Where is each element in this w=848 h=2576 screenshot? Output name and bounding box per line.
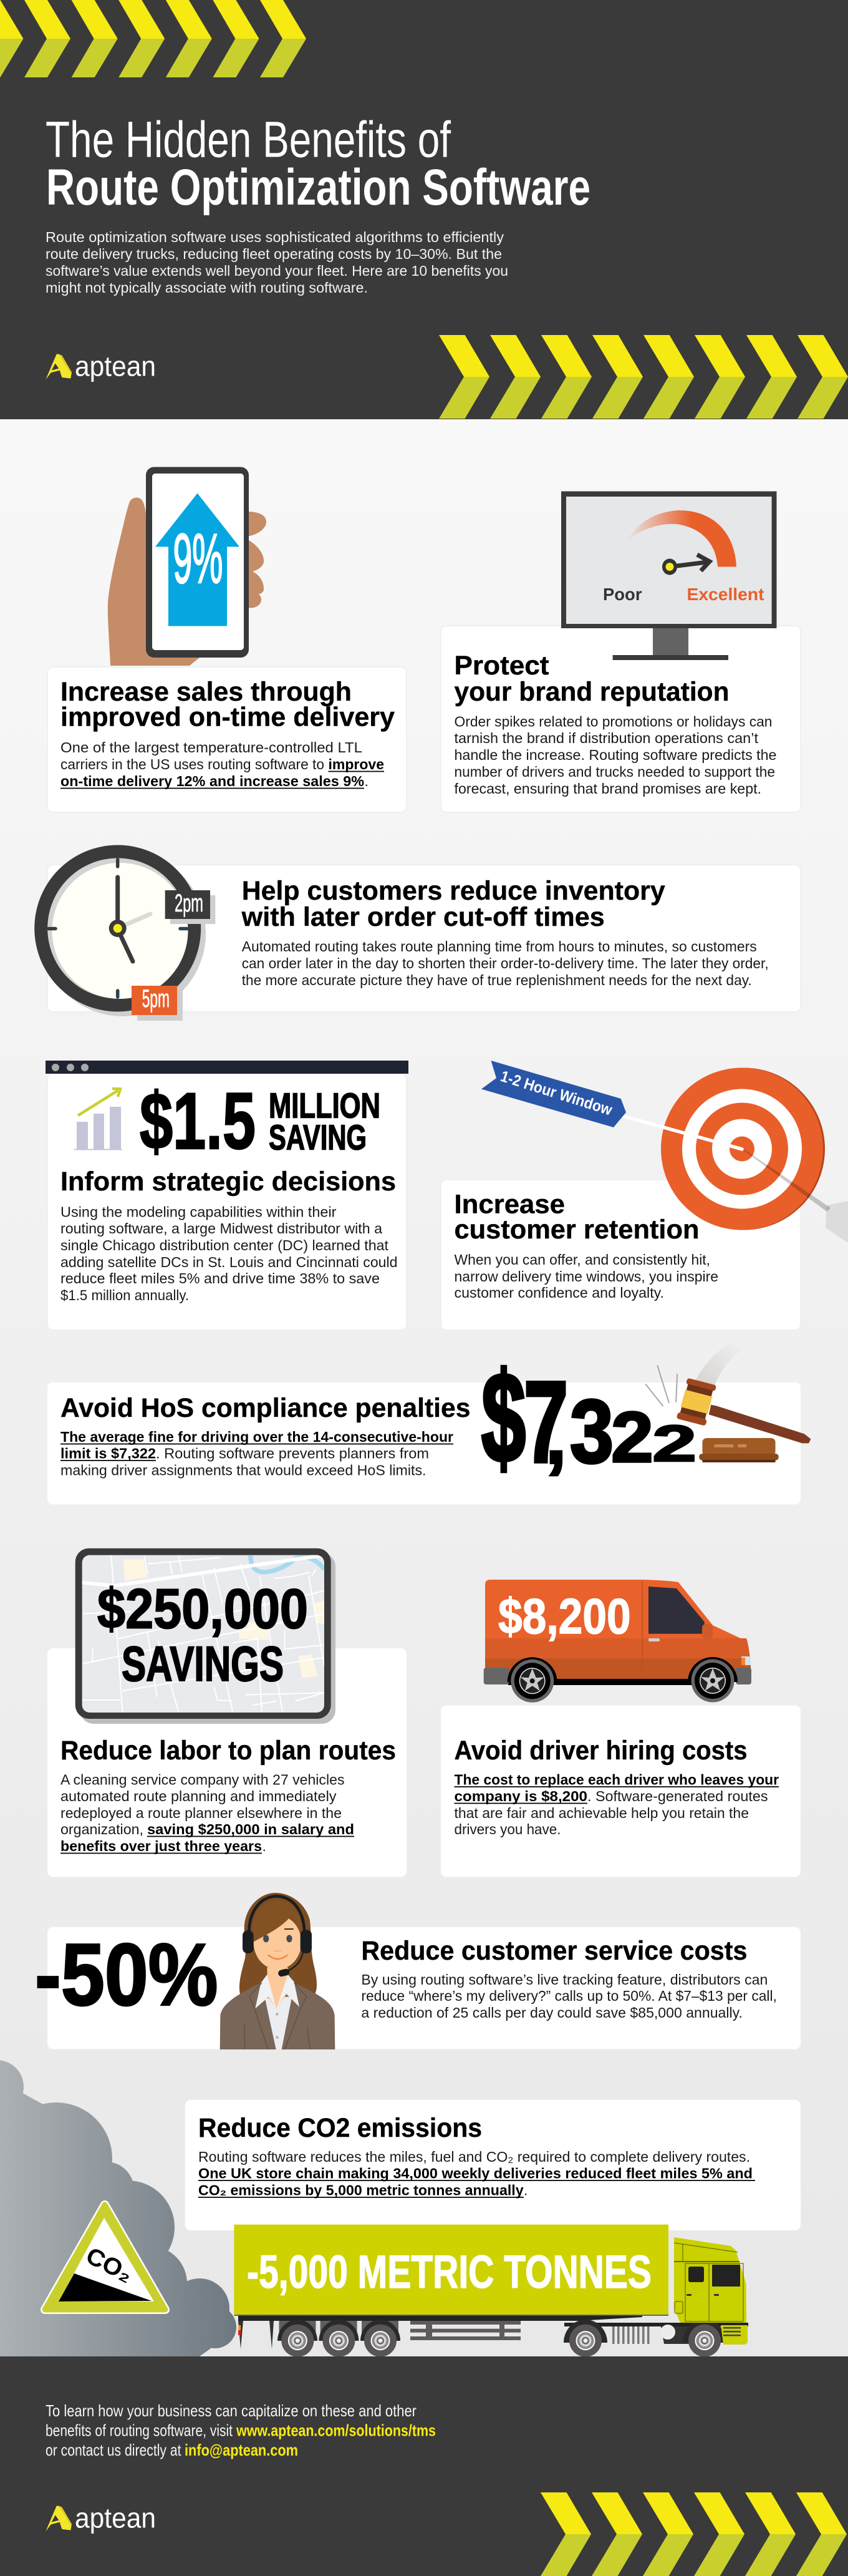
panel: customer retention <box>441 1180 801 1330</box>
text: reduce labor <box>60 1772 354 1854</box>
browser bar <box>46 1061 408 1074</box>
text: driver hiring costs: The cost to replace each driver who leaves your <box>454 1772 779 1788</box>
stat: $250,000 savings <box>97 1578 308 1691</box>
clock hands <box>109 877 150 961</box>
text: excellent: Excellent <box>687 585 764 604</box>
text: reduce labor: saving $250,000 in salary and <box>147 1821 354 1837</box>
icon: gavel <box>645 1343 811 1462</box>
text: driver hiring costs: company is $8,200 <box>454 1788 587 1804</box>
stat: $8,200: $8,200 <box>498 1588 631 1644</box>
heading: protect brand: Protect <box>454 651 549 681</box>
text: inform strategic decisions: reduce fleet miles 5% and drive time 38% to save <box>60 1270 380 1286</box>
icon: CO2 warning sign <box>45 2205 165 2310</box>
text: protect brand: number of drivers and trucks needed to support the <box>454 764 775 780</box>
chart: gauge arc <box>627 510 736 566</box>
stat: $7,322 in perspective: 2 <box>611 1398 653 1477</box>
call to action: info@aptean.com <box>185 2441 298 2459</box>
text: reduce inventory: the more accurate picture they have of true replenishment needs for the next day. <box>242 972 752 988</box>
text: reduce inventory: Automated routing takes route planning time from hours to minutes, so customers <box>242 938 757 955</box>
call to action <box>46 2401 436 2459</box>
intro paragraph: might not typically associate with routing software. <box>46 279 368 296</box>
text: HoS compliance: . Routing software prevents planners from <box>156 1445 429 1461</box>
label: 2pm <box>165 890 215 924</box>
stat: $250,000 savings: SAVINGS <box>122 1636 284 1691</box>
cab <box>674 2237 746 2323</box>
heading: customer retention <box>454 1190 700 1245</box>
heading: protect brand: your brand reputation <box>454 677 730 707</box>
heading: protect brand <box>454 651 730 707</box>
logo: aptean: aptean <box>75 351 156 382</box>
icon: gauge needle <box>662 555 710 575</box>
text: inform strategic decisions: Using the modeling capabilities within their <box>60 1204 337 1220</box>
panel: protect brand <box>441 626 801 812</box>
logo: aptean footer: aptean <box>75 2502 156 2534</box>
text: driver hiring costs: drivers you have. <box>454 1821 561 1837</box>
icon: up arrow 9%: 9% <box>173 520 223 598</box>
text: increase sales: carriers in the US uses routing software to <box>60 756 324 772</box>
text: customer service costs <box>361 1971 777 2021</box>
text: reduce labor: automated route planning and immediately <box>60 1788 337 1804</box>
stat: $250,000 savings: $250,000 <box>97 1578 308 1641</box>
icon: clock <box>34 845 215 1021</box>
heading: driver hiring costs: Avoid driver hiring costs <box>454 1736 747 1766</box>
panel: driver hiring costs <box>441 1706 801 1877</box>
heading: reduce inventory: with later order cut-off times <box>241 902 605 932</box>
illustration: exhaust cloud <box>0 2060 236 2356</box>
chevrons: top left <box>0 0 306 77</box>
heading: reduce CO2: Reduce CO2 emissions <box>198 2113 482 2143</box>
chevrons: header bottom right <box>439 335 848 419</box>
text: customer retention: customer confidence and loyalty. <box>454 1285 664 1301</box>
van window <box>648 1587 705 1634</box>
text: increase sales: One of the largest temperature-controlled LTL <box>60 739 362 756</box>
heading: reduce labor: Reduce labor to plan routes <box>60 1736 396 1766</box>
chevrons: footer <box>541 2492 847 2576</box>
header band <box>0 0 848 419</box>
stat: -50%: -50% <box>35 1925 218 2024</box>
stat: $7,322 in perspective: 2 <box>652 1414 696 1472</box>
panel: customer service costs <box>47 1927 801 2049</box>
title: Route Optimization Software <box>46 159 590 216</box>
icon: tablet with map <box>75 1548 335 1724</box>
text: HoS compliance: limit is $7,322 <box>60 1445 156 1461</box>
text: reduce CO2: . <box>524 2182 528 2199</box>
tractor chassis <box>564 2320 748 2344</box>
text: inform strategic decisions: routing software, a large Midwest distributor with a <box>60 1220 382 1237</box>
stat: $1.5 million saving: $1.5 <box>140 1077 256 1166</box>
stat: $7,322 in perspective <box>481 1346 696 1489</box>
intro paragraph: software’s value extends well beyond your fleet. Here are 10 benefits you <box>46 263 508 279</box>
icon: target with arrow <box>481 1061 848 1243</box>
text: reduce inventory: can order later in the day to shorten their order-to-delivery time. The later they order, <box>242 955 769 971</box>
text: reduce labor: organization, <box>60 1821 143 1837</box>
icon: customer service agent <box>220 1893 335 2049</box>
intro paragraph <box>46 229 508 296</box>
heading: inform strategic decisions: Inform strategic decisions <box>60 1167 396 1197</box>
text: HoS compliance: The average fine for driving over the 14-consecutive-hour <box>60 1429 453 1445</box>
heading: reduce inventory <box>241 876 665 932</box>
stat: $7,322 in perspective: 3 <box>570 1381 614 1482</box>
icon: monitor with gauge <box>561 492 777 660</box>
side rails <box>410 2321 521 2340</box>
panel: reduce inventory <box>47 865 801 1012</box>
text: reduce inventory <box>242 938 769 988</box>
heading: increase sales: improved on-time delivery <box>60 702 395 732</box>
text: driver hiring costs: that are fair and achievable help you retain the <box>454 1805 749 1821</box>
icon: up arrow 9% <box>155 493 239 626</box>
text: protect brand: forecast, ensuring that brand promises are kept. <box>454 780 761 797</box>
call to action: www.aptean.com/solutions/tms <box>236 2421 436 2440</box>
call to action: or contact us directly at <box>46 2441 181 2459</box>
stat: $1.5 million saving <box>140 1077 380 1166</box>
text: customer retention: narrow delivery time windows, you inspire <box>454 1268 718 1285</box>
truck text: -5,000 METRIC TONNES <box>247 2246 652 2298</box>
text: poor: Poor <box>603 585 642 604</box>
intro paragraph: Route optimization software uses sophisticated algorithms to efficiently <box>46 229 504 245</box>
heading: increase sales: Increase sales through <box>60 677 352 707</box>
text: inform strategic decisions: single Chicago distribution center (DC) learned that <box>60 1237 389 1253</box>
heading: customer retention: customer retention <box>454 1215 700 1245</box>
text: protect brand: tarnish the brand if distribution operations can’t <box>454 730 759 746</box>
label: 5pm <box>132 985 183 1021</box>
intro paragraph: route delivery trucks, reducing fleet operating costs by 10–30%. But the <box>46 246 502 262</box>
text: HoS compliance <box>60 1429 453 1479</box>
footer band <box>0 2356 848 2576</box>
icon: hand holding phone <box>108 467 266 666</box>
arrow shadow <box>826 1201 848 1243</box>
chart: rising bars <box>74 1089 122 1150</box>
illustration: truck <box>234 2225 748 2357</box>
arrow shaft <box>612 1113 742 1149</box>
panel: HoS compliance <box>47 1383 801 1505</box>
icon: CO2 warning sign: CO₂ <box>82 2243 137 2288</box>
label: 5pm: 5pm <box>142 985 170 1013</box>
text: reduce labor: redeployed a route planner elsewhere in the <box>60 1805 342 1821</box>
stat: $7,322 in perspective: , <box>546 1392 566 1480</box>
text: customer retention <box>454 1252 718 1301</box>
text: customer service costs: By using routing software’s live tracking feature, distributors can <box>361 1971 768 1988</box>
text: HoS compliance: making driver assignments that would exceed HoS limits. <box>60 1462 426 1479</box>
label: 2pm: 2pm <box>175 890 203 917</box>
text: inform strategic decisions <box>60 1204 398 1303</box>
text: inform strategic decisions: adding satellite DCs in St. Louis and Cincinnati could <box>60 1254 398 1270</box>
text: reduce CO2: One UK store chain making 34,000 weekly deliveries reduced fleet miles 5% and <box>198 2165 753 2181</box>
icon: orange van <box>484 1580 751 1703</box>
banner: 1-2 hour window: 1-2 Hour Window <box>498 1067 614 1119</box>
heading: reduce inventory: Help customers reduce inventory <box>242 876 665 906</box>
stat: $7,322 in perspective: $ <box>481 1346 526 1489</box>
text: customer service costs: a reduction of 25 calls per day could save $85,000 annually. <box>361 2005 743 2021</box>
text: protect brand <box>454 714 777 797</box>
text: reduce labor: benefits over just three years <box>60 1838 262 1854</box>
trailer <box>234 2225 668 2315</box>
page background <box>0 419 848 2357</box>
wheels <box>281 2325 314 2357</box>
text: customer retention: When you can offer, and consistently hit, <box>454 1252 710 1268</box>
panel: inform strategic decisions <box>46 1061 408 1330</box>
text: reduce labor: . <box>262 1838 266 1854</box>
text: reduce labor: A cleaning service company with 27 vehicles <box>60 1772 344 1788</box>
text: increase sales: on-time delivery 12% and increase sales 9% <box>60 773 364 789</box>
call to action: benefits of routing software, visit <box>46 2421 233 2440</box>
text: reduce CO2: Routing software reduces the miles, fuel and CO₂ required to complete delivery routes. <box>198 2149 750 2165</box>
text: increase sales: . <box>364 773 369 789</box>
panel: increase sales <box>47 667 407 812</box>
map <box>82 1553 324 1713</box>
panel: reduce labor <box>47 1648 407 1877</box>
stat: $1.5 million saving: SAVING <box>269 1118 367 1158</box>
stat: $1.5 million saving: MILLION <box>269 1086 380 1125</box>
text: driver hiring costs <box>454 1772 779 1837</box>
text: protect brand: Order spikes related to promotions or holidays can <box>454 714 772 730</box>
heading: increase sales <box>60 677 395 732</box>
rear axle panels <box>279 2321 398 2338</box>
text: protect brand: handle the increase. Routing software predicts the <box>454 747 777 763</box>
text: reduce CO2 <box>198 2149 755 2199</box>
heading: customer retention: Increase <box>454 1190 565 1220</box>
stat: $7,322 in perspective: 7 <box>524 1358 568 1487</box>
panel: reduce CO2 <box>185 2100 801 2230</box>
title <box>46 111 590 216</box>
text: inform strategic decisions: $1.5 million annually. <box>60 1287 189 1303</box>
text: driver hiring costs: . Software-generated routes <box>587 1788 768 1804</box>
call to action: To learn how your business can capitalize on these and other <box>46 2401 417 2420</box>
text: customer service costs: reduce “where’s my delivery?” calls up to 50%. At $7–$13 per call, <box>361 1988 777 2004</box>
heading: HoS compliance: Avoid HoS compliance penalties <box>60 1393 470 1423</box>
text: increase sales <box>60 739 384 789</box>
title: The Hidden Benefits of <box>46 111 451 168</box>
text: increase sales: improve <box>328 756 384 772</box>
text: reduce CO2: CO₂ emissions by 5,000 metric tonnes annually <box>198 2182 524 2199</box>
heading: customer service costs: Reduce customer service costs <box>361 1936 747 1966</box>
